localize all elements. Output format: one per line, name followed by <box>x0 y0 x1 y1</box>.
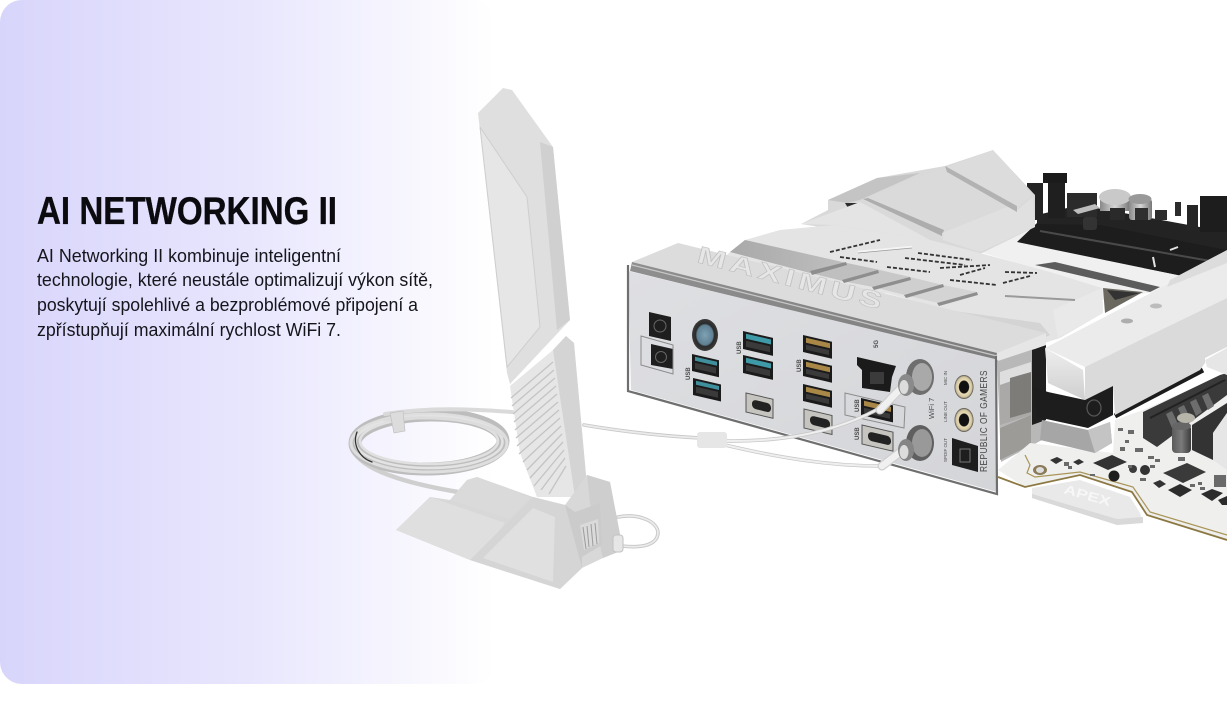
I/O plate top lip and MAXIMUS lettering <box>630 242 1046 361</box>
plate labels: LINE OUT <box>943 401 948 422</box>
cables from antenna to connectors <box>584 408 880 466</box>
plate labels: USB <box>855 427 861 440</box>
description text block: zpřístupňují maximální rychlost WiFi 7. <box>37 319 341 340</box>
PS/2 style combo port <box>692 319 718 351</box>
plate labels: WiFi 7 <box>927 398 936 419</box>
motherboard <box>628 150 1227 540</box>
board upper area with DIMM slots and components <box>980 173 1227 313</box>
right bracket metal <box>997 345 1046 462</box>
title: AI NETWORKING II <box>37 190 337 233</box>
description text block: technologie, které neustále optimalizují výkon sítě, <box>37 269 433 290</box>
plate labels: USB <box>797 359 803 372</box>
plate labels: 5G <box>874 340 880 348</box>
APEX tag <box>1032 480 1143 525</box>
5G LAN port <box>857 357 896 392</box>
right large white heatsink block <box>1033 250 1227 428</box>
heatsink: top block <box>801 150 1035 262</box>
I/O plate top lip and MAXIMUS lettering: MAXIMUS <box>694 242 889 316</box>
plate labels: USB <box>737 341 743 354</box>
description text block: poskytují spolehlivé a bezproblémové připojení a <box>37 294 419 315</box>
antenna base <box>396 475 623 589</box>
description text block: AI Networking II kombinuje inteligentní <box>37 245 342 266</box>
audio jacks <box>954 375 974 432</box>
plate labels <box>686 340 990 472</box>
USB-C ports <box>746 393 893 451</box>
gold USB ports <box>803 335 893 422</box>
PCB with gold trace <box>998 370 1227 540</box>
S/PDIF optical port <box>952 438 978 472</box>
plate labels: USB <box>686 367 692 380</box>
plate labels: REPUBLIC OF GAMERS <box>978 370 990 472</box>
description text block <box>37 245 433 340</box>
plate labels: SPDIF OUT <box>943 438 948 462</box>
APEX tag: APEX <box>1062 481 1113 509</box>
plate labels: MIC IN <box>943 371 948 385</box>
antenna connectors <box>880 359 934 466</box>
plate labels: USB <box>855 399 861 412</box>
I/O plate face with ports <box>628 265 997 494</box>
antenna cable coil and loops <box>351 409 658 547</box>
antenna upper panel <box>478 88 570 384</box>
heatsink: main shroud with ROG pattern <box>700 225 1103 357</box>
background panel: lavender gradient <box>0 0 495 684</box>
clear CMOS and BIOS buttons <box>641 312 673 374</box>
antenna <box>396 88 623 589</box>
cable clip <box>697 432 727 448</box>
teal USB ports <box>692 331 773 401</box>
antenna ribbed lower panel <box>510 336 588 497</box>
